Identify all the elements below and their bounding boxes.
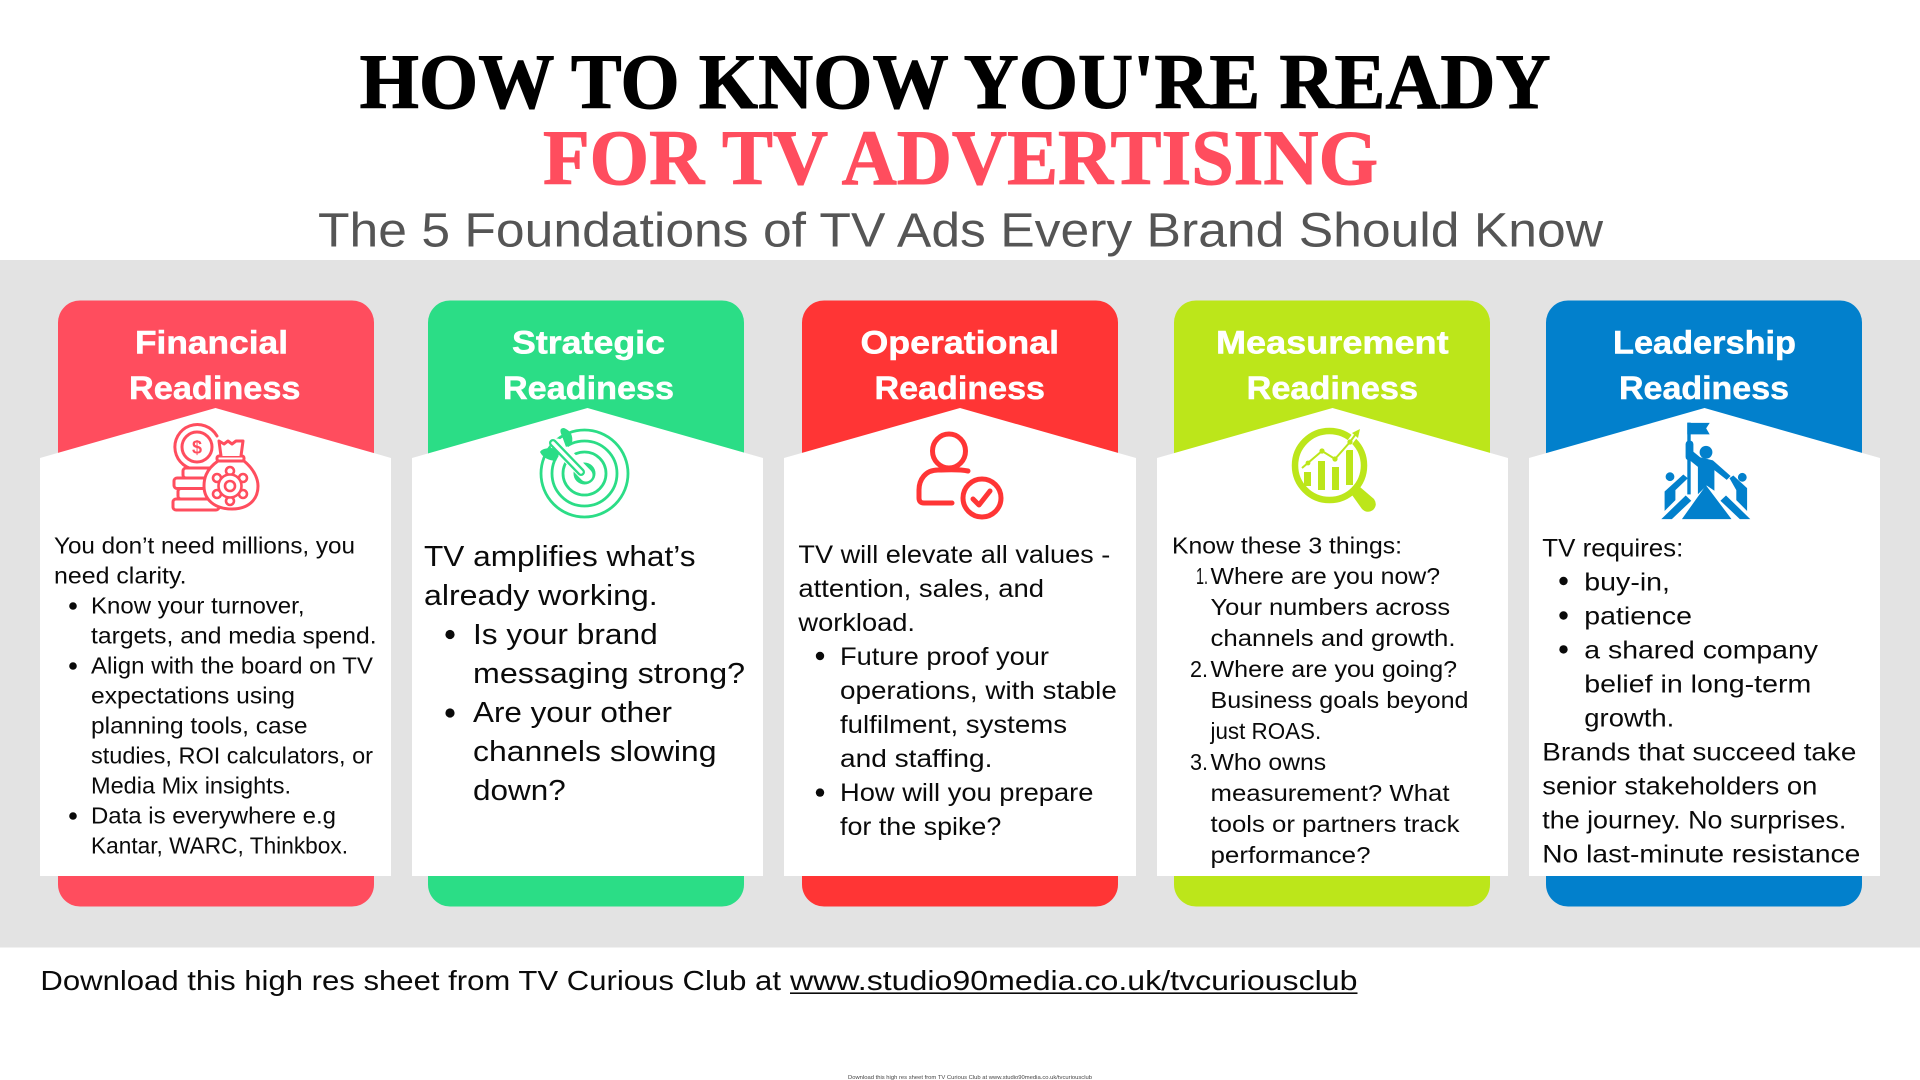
- body text: financial: Data is everywhere e.g: [91, 803, 336, 829]
- body text: measurement: Where are you going?: [1210, 656, 1457, 682]
- body text: strategic: messaging strong?: [473, 658, 745, 690]
- heading: measurement readiness: Readiness: [1247, 370, 1418, 406]
- body text: financial: Know your turnover,: [91, 593, 304, 619]
- panel: operational readiness: [784, 300, 1136, 906]
- body text: operational: operations, with stable: [840, 677, 1117, 705]
- body text: operational: How will you prepare: [840, 779, 1093, 807]
- icon: dart target: [540, 428, 628, 517]
- icon: coins and money bag: [173, 425, 258, 510]
- footer: download line: [40, 965, 1357, 996]
- heading: leadership readiness: [1613, 324, 1796, 406]
- body text: measurement: 2.: [1190, 656, 1208, 682]
- body text: leadership: No last-minute resistance: [1542, 840, 1860, 868]
- body text: financial: targets, and media spend.: [91, 623, 377, 649]
- body text: measurement: just ROAS.: [1210, 718, 1321, 744]
- body text: strategic: Are your other: [473, 697, 672, 729]
- body text: measurement: performance?: [1210, 842, 1370, 868]
- heading: measurement readiness: Measurement: [1216, 324, 1449, 360]
- body text: measurement: Know these 3 things:: [1172, 532, 1402, 558]
- body text: financial: need clarity.: [54, 563, 186, 589]
- body text: operational: workload.: [797, 609, 915, 637]
- heading: operational readiness: Operational: [860, 324, 1059, 360]
- title: HOW TO KNOW YOU'RE READY: [360, 38, 1551, 125]
- heading: operational readiness: Readiness: [874, 370, 1045, 406]
- body text: strategic: already working.: [424, 580, 658, 612]
- body text: strategic: down?: [473, 775, 566, 807]
- icon: coins and money bag: $: [192, 438, 202, 458]
- heading: strategic readiness: Strategic: [512, 324, 665, 360]
- body text: measurement: 1.: [1196, 563, 1208, 589]
- panel: financial readiness: [40, 300, 391, 906]
- heading: leadership readiness: Leadership: [1613, 324, 1796, 360]
- body text: leadership: [1542, 534, 1860, 868]
- body text: financial: studies, ROI calculators, or: [91, 743, 373, 769]
- heading: measurement readiness: [1216, 324, 1449, 406]
- body text: measurement: 3.: [1190, 749, 1208, 775]
- body text: leadership: the journey. No surprises.: [1542, 806, 1846, 834]
- body text: measurement: tools or partners track: [1210, 811, 1460, 837]
- body text: financial: planning tools, case: [91, 713, 308, 739]
- body text: leadership: a shared company: [1584, 636, 1819, 664]
- body text: measurement: measurement? What: [1210, 780, 1450, 806]
- heading: leadership readiness: Readiness: [1619, 370, 1789, 406]
- body text: leadership: belief in long-term: [1584, 670, 1811, 698]
- body text: measurement: Where are you now?: [1210, 563, 1440, 589]
- icon: person with check mark: [919, 434, 1001, 517]
- body text: leadership: patience: [1584, 602, 1692, 630]
- body text: strategic: TV amplifies what’s: [424, 541, 696, 573]
- body text: strategic: channels slowing: [473, 736, 716, 768]
- body text: operational: TV will elevate all values -: [798, 541, 1110, 569]
- body text: financial: Align with the board on TV: [91, 653, 374, 679]
- body text: leadership: growth.: [1584, 704, 1674, 732]
- body text: operational: [797, 541, 1117, 841]
- body text: measurement: channels and growth.: [1210, 625, 1456, 651]
- heading: financial readiness: Financial: [135, 324, 288, 360]
- body text: strategic: [424, 541, 745, 807]
- heading: strategic readiness: [503, 324, 674, 406]
- icon: magnifier with chart: [1295, 429, 1376, 512]
- body text: measurement: Business goals beyond: [1210, 687, 1468, 713]
- heading: strategic readiness: Readiness: [503, 370, 674, 406]
- body text: operational: Future proof your: [840, 643, 1049, 671]
- panel: strategic readiness: [412, 300, 763, 906]
- body text: operational: attention, sales, and: [798, 575, 1044, 603]
- body text: operational: and staffing.: [840, 745, 992, 773]
- body text: operational: for the spike?: [840, 813, 1001, 841]
- body text: financial: Kantar, WARC, Thinkbox.: [91, 833, 348, 859]
- title: FOR TV ADVERTISING: [543, 114, 1378, 201]
- body text: financial: You don’t need millions, you: [54, 532, 355, 558]
- heading: operational readiness: [860, 324, 1059, 406]
- body text: leadership: buy-in,: [1584, 568, 1670, 596]
- body text: leadership: Brands that succeed take: [1542, 738, 1856, 766]
- body text: strategic: Is your brand: [473, 619, 658, 651]
- body text: measurement: Your numbers across: [1210, 594, 1450, 620]
- footer: download line: www.studio90media.co.uk/tvcuriousclub: [789, 965, 1358, 996]
- heading: financial readiness: [129, 324, 300, 406]
- body text: measurement: [1172, 532, 1468, 868]
- body text: operational: fulfilment, systems: [840, 711, 1067, 739]
- grey background band: [0, 260, 1920, 948]
- body text: leadership: senior stakeholders on: [1542, 772, 1817, 800]
- body text: financial: Media Mix insights.: [91, 773, 291, 799]
- body text: financial: [54, 532, 377, 859]
- body text: financial: expectations using: [91, 683, 295, 709]
- body text: leadership: TV requires:: [1542, 534, 1683, 562]
- subtitle: The 5 Foundations of TV Ads Every Brand Should Know: [318, 205, 1603, 258]
- heading: financial readiness: Readiness: [129, 370, 300, 406]
- footer: download line: Download this high res sheet from TV Curious Club at: [40, 965, 781, 996]
- icon: leader with flag on mountain: [1662, 423, 1749, 519]
- body text: measurement: Who owns: [1210, 749, 1326, 775]
- panel: measurement readiness: [1157, 300, 1508, 906]
- panel: leadership readiness: [1529, 300, 1880, 906]
- title: [360, 38, 1551, 201]
